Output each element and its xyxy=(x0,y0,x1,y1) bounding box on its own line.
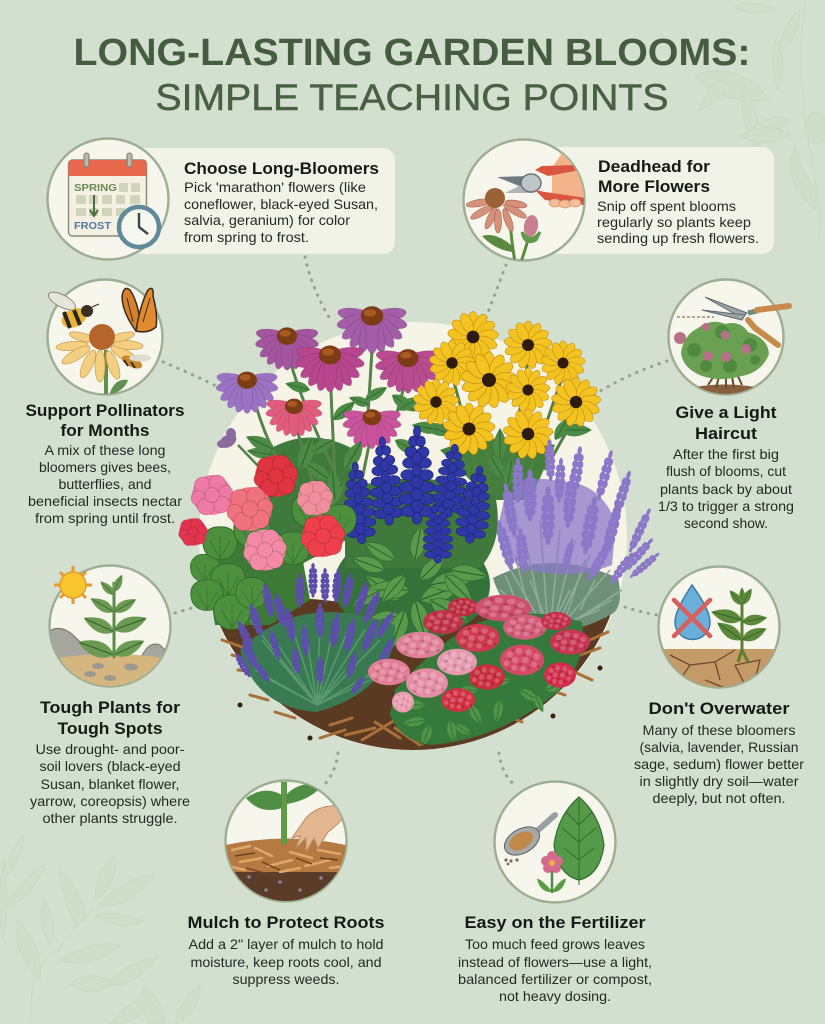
icon: shears over a bush xyxy=(668,280,789,395)
text: deadhead: Snip off spent blooms xyxy=(597,199,736,214)
Russian sage, right xyxy=(493,439,662,632)
text: fertilizer: instead of flowers—use a light, xyxy=(458,955,652,970)
text: tough plants: other plants struggle. xyxy=(42,811,178,826)
title: SIMPLE TEACHING POINTS xyxy=(156,77,668,118)
soil and mulch bed xyxy=(220,598,611,750)
black-eyed Susan stems and leaves xyxy=(411,350,592,490)
lavender, left xyxy=(233,563,397,712)
coneflower stems and leaves xyxy=(243,350,454,515)
text: support pollinators xyxy=(26,401,184,526)
text: tough plants: Tough Spots xyxy=(58,719,162,738)
icon: fertilizer scoop, large leaf, small flower xyxy=(494,782,616,902)
background leaves: bottom left xyxy=(0,835,200,1024)
text: support pollinators: for Months xyxy=(60,421,150,440)
text: tough plants: Tough Plants for xyxy=(40,698,180,717)
text: support pollinators: butterflies, and xyxy=(58,477,152,492)
text: tough plants: Susan, blanket flower, xyxy=(40,777,180,792)
text: mulch: Add a 2" layer of mulch to hold xyxy=(188,937,384,952)
text: mulch xyxy=(188,913,384,987)
text: overwater xyxy=(634,699,804,806)
text: overwater: sage, sedum) flower better xyxy=(634,757,804,772)
icon: pruners snipping a spent bloom xyxy=(464,140,590,262)
text: support pollinators: Support Pollinators xyxy=(26,401,184,420)
text: deadhead: regularly so plants keep xyxy=(597,215,751,230)
text: tough plants: yarrow, coreopsis) where xyxy=(30,794,190,809)
icon: plant in poor soil with sun xyxy=(45,566,175,695)
text: choose long-bloomers: from spring to frost. xyxy=(184,230,309,245)
text: choose long-bloomers: coneflower, black-eyed Susan, xyxy=(184,197,378,212)
panel: don't overwater xyxy=(634,566,804,806)
text: overwater: Don't Overwater xyxy=(648,699,790,718)
text: tough plants: Use drought- and poor- xyxy=(36,742,184,757)
foliage mass behind flowers xyxy=(205,438,555,640)
coneflowers xyxy=(215,305,442,449)
panel: choose long-bloomers xyxy=(48,138,395,260)
icon: crossed-out water drop and plant on cracked soil xyxy=(655,566,785,695)
panel: support pollinators xyxy=(26,280,184,526)
text: fertilizer: Easy on the Fertilizer xyxy=(464,913,646,932)
panel: deadhead for more flowers xyxy=(464,140,774,262)
sedum flower heads xyxy=(368,595,590,712)
text: deadhead xyxy=(597,157,759,246)
left geranium leaves xyxy=(190,493,356,629)
text: overwater: in slightly dry soil—water xyxy=(640,774,799,789)
text: haircut: 1/3 to trigger a strong xyxy=(658,499,794,514)
text: fertilizer: balanced fertilizer or compost, xyxy=(458,972,652,987)
text: choose long-bloomers: salvia, geranium) for color xyxy=(184,213,350,228)
icon: calendar and clock: FROST xyxy=(74,220,112,232)
text: support pollinators: A mix of these long xyxy=(44,443,166,458)
icon detail: butterfly xyxy=(122,288,157,332)
icon detail: sun xyxy=(54,566,92,604)
text: deadhead: More Flowers xyxy=(598,177,710,196)
sedum foliage xyxy=(390,614,583,748)
text: choose long-bloomers xyxy=(184,159,379,245)
text: haircut: second show. xyxy=(684,516,768,531)
blue salvia spikes xyxy=(339,426,496,563)
icon: bee, butterfly and daisy xyxy=(46,280,162,395)
icon detail: shears xyxy=(702,297,789,345)
text: tough plants xyxy=(30,698,190,826)
text: mulch: Mulch to Protect Roots xyxy=(188,913,384,932)
icon: calendar and clock: SPRING xyxy=(74,182,117,194)
text: overwater: deeply, but not often. xyxy=(652,791,786,806)
text: mulch: moisture, keep roots cool, and xyxy=(190,955,382,970)
text: overwater: (salvia, lavender, Russian xyxy=(640,740,798,755)
text: choose long-bloomers: Pick 'marathon' flowers (like xyxy=(184,180,366,195)
callout background xyxy=(545,147,774,254)
text: haircut: flush of blooms, cut xyxy=(666,464,786,479)
panel: give a light haircut xyxy=(658,280,794,531)
text: haircut: plants back by about xyxy=(660,482,792,497)
icon detail: bee xyxy=(46,289,99,332)
text: haircut: Haircut xyxy=(695,424,757,443)
panel: easy on the fertilizer xyxy=(458,782,652,1004)
text: mulch: suppress weeds. xyxy=(232,972,340,987)
cream circle backdrop xyxy=(199,322,627,750)
title: LONG-LASTING GARDEN BLOOMS: xyxy=(74,32,750,74)
background leaves: top right xyxy=(695,0,825,240)
text: deadhead: sending up fresh flowers. xyxy=(597,231,759,246)
text: support pollinators: from spring until frost. xyxy=(35,511,175,526)
black-eyed Susans xyxy=(413,312,601,460)
small purple bud xyxy=(217,428,262,470)
connector dots xyxy=(163,257,667,787)
icon: hand spreading mulch xyxy=(225,780,347,906)
text: support pollinators: beneficial insects nectar xyxy=(28,494,183,509)
text: haircut xyxy=(658,403,794,531)
text: fertilizer xyxy=(458,913,652,1004)
text: tough plants: soil lovers (black-eyed xyxy=(40,759,180,774)
text: choose long-bloomers: Choose Long-Bloomers xyxy=(184,159,379,178)
panel: mulch to protect roots xyxy=(188,780,384,987)
salvia foliage xyxy=(349,524,489,652)
text: haircut: Give a Light xyxy=(676,403,777,422)
text: support pollinators: bloomers gives bees, xyxy=(39,460,171,475)
text: deadhead: Deadhead for xyxy=(598,157,710,176)
text: overwater: Many of these bloomers xyxy=(642,723,796,738)
geranium flower heads xyxy=(179,455,345,571)
text: fertilizer: not heavy dosing. xyxy=(499,989,611,1004)
text: fertilizer: Too much feed grows leaves xyxy=(465,937,645,952)
callout background xyxy=(130,148,395,254)
title xyxy=(74,32,750,118)
icon: calendar and clock xyxy=(48,138,168,260)
panel: tough plants for tough spots xyxy=(30,566,190,826)
text: haircut: After the first big xyxy=(673,447,779,462)
central garden illustration xyxy=(179,305,662,750)
